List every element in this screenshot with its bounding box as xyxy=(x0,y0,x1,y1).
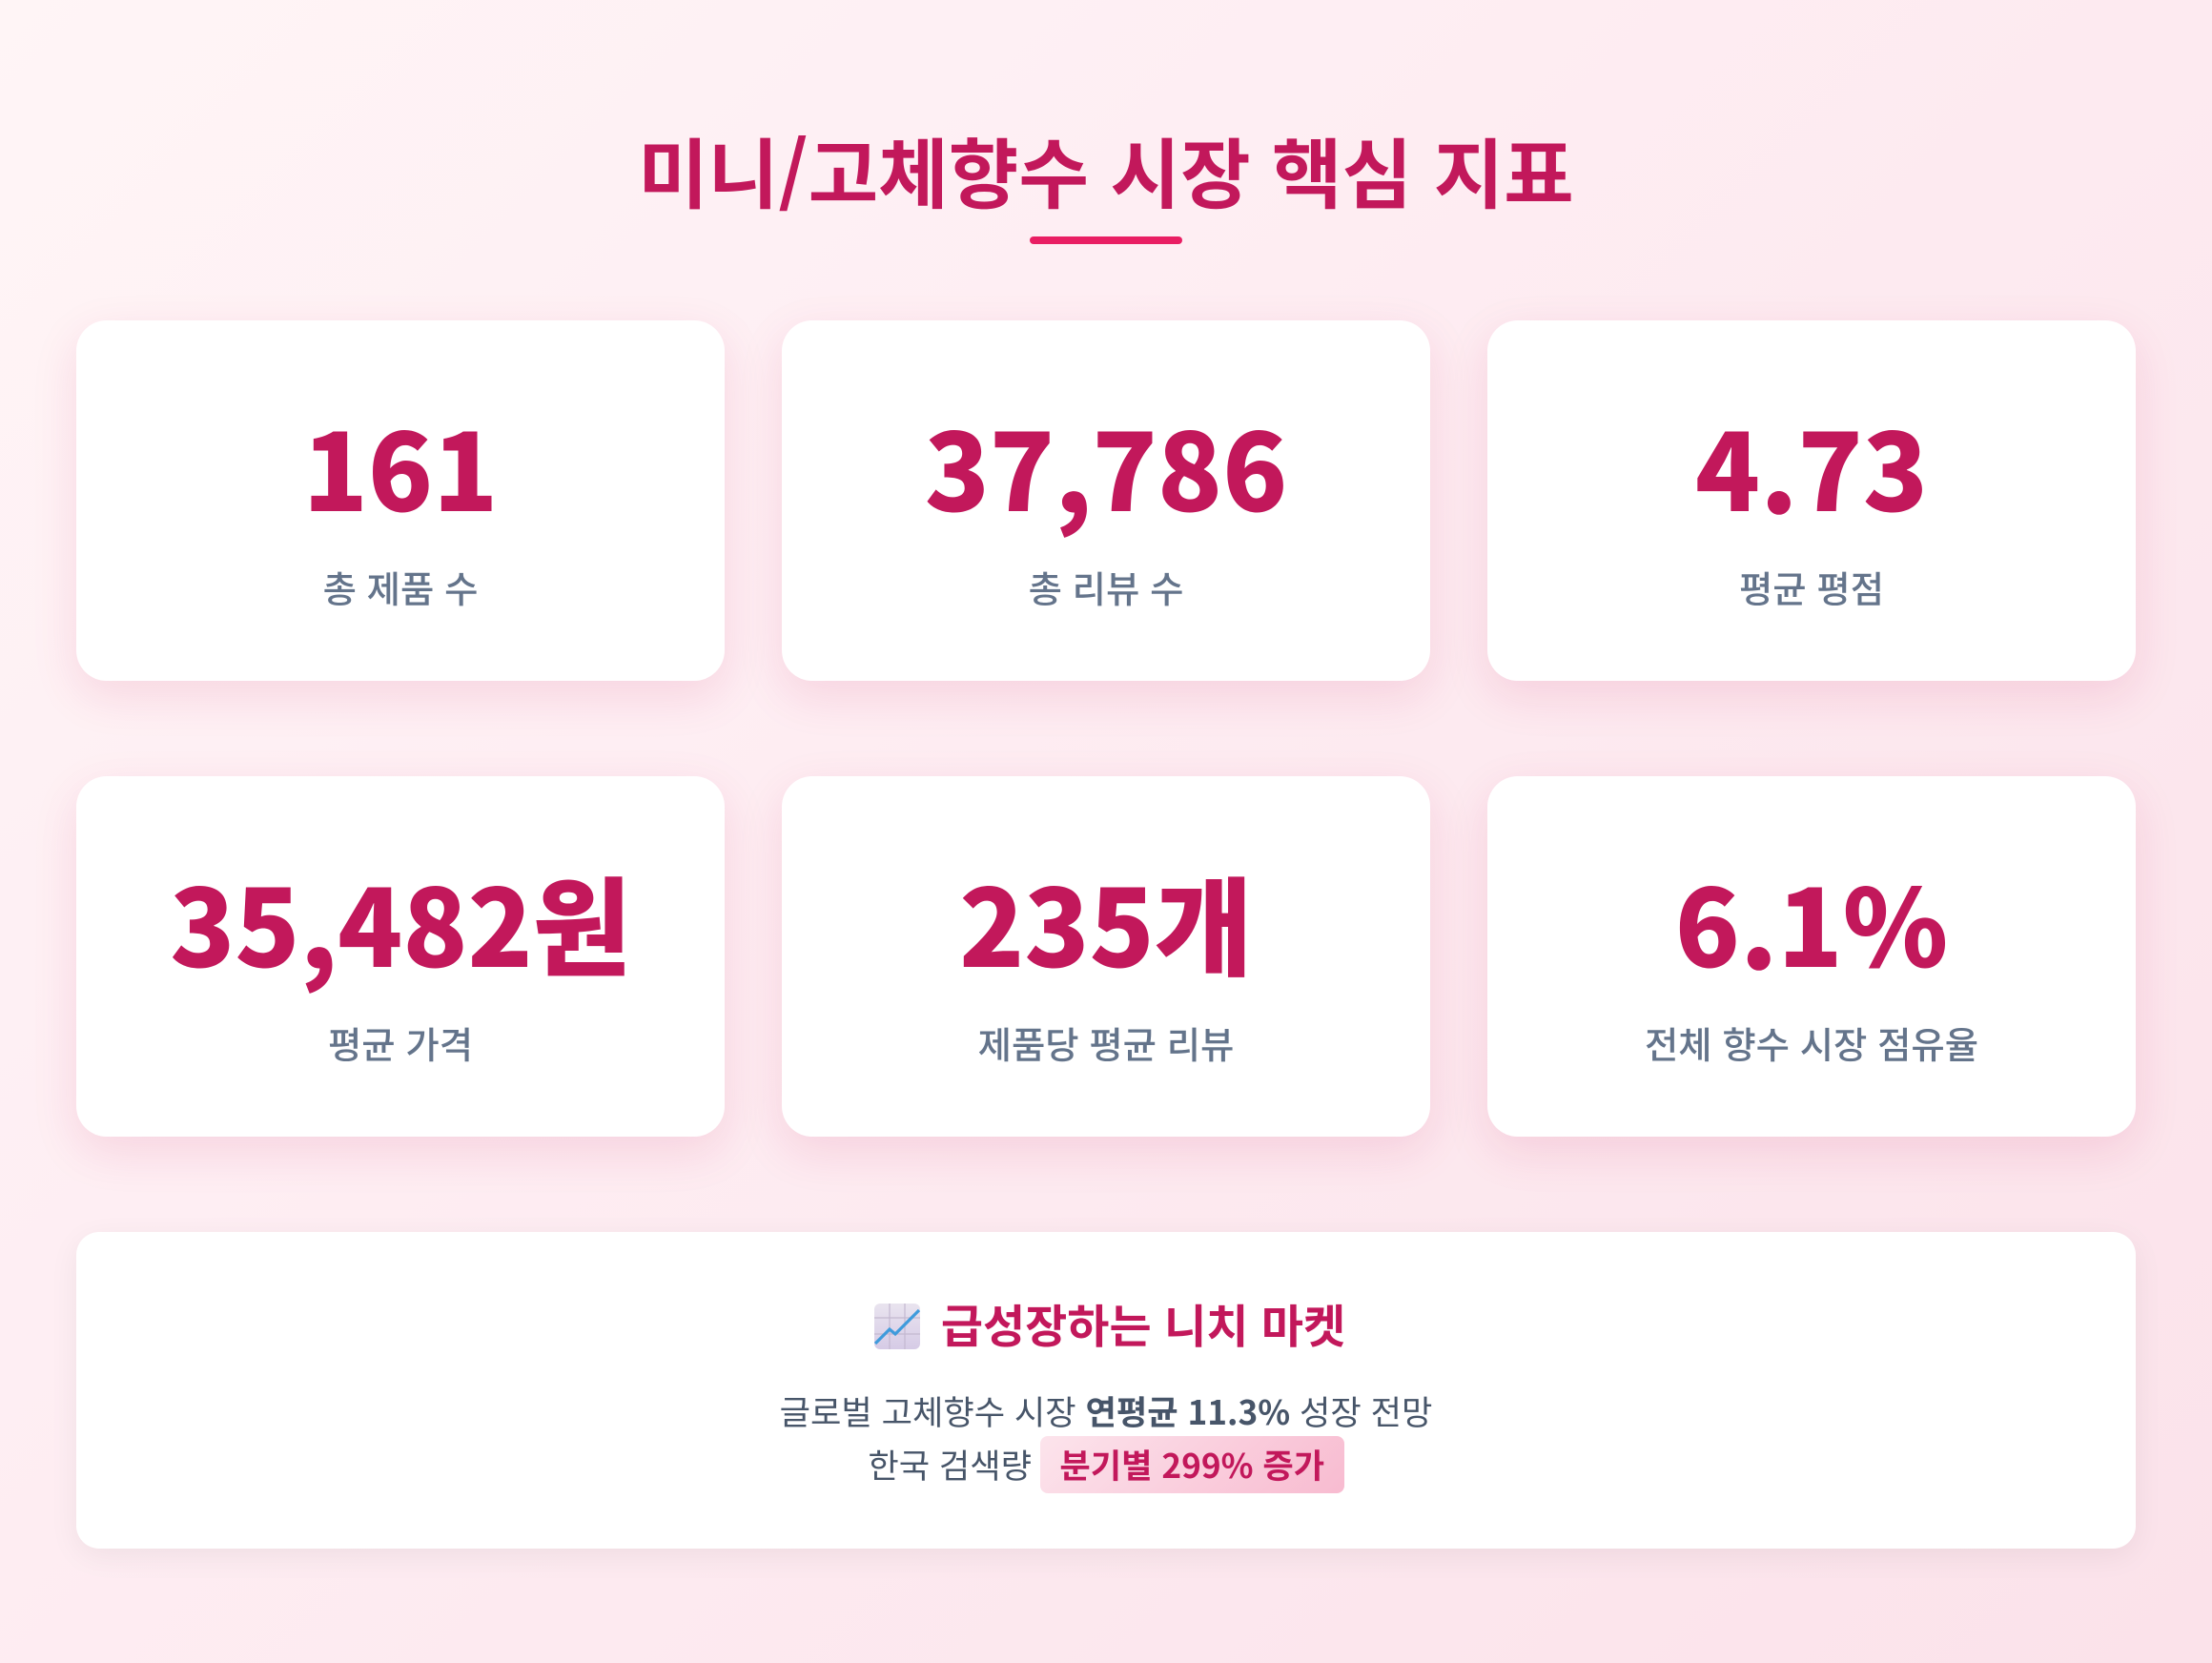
card: average rating: 4.73 xyxy=(1695,388,1928,543)
card: total products xyxy=(76,320,725,681)
card: average price: 평균 가격 xyxy=(328,1016,473,1070)
card: total reviews: 총 리뷰 수 xyxy=(1029,561,1183,614)
card: total products: 161 xyxy=(303,388,498,543)
text: korea search volume: 한국 검색량 xyxy=(868,1440,1032,1488)
icon: chart increasing xyxy=(874,1304,920,1349)
panel: niche market insight xyxy=(76,1232,2136,1549)
card: total products: 총 제품 수 xyxy=(323,561,478,614)
panel heading: 급성장하는 니치 마켓 xyxy=(941,1289,1345,1356)
title: 미니/고체향수 시장 핵심 지표 xyxy=(638,114,1574,225)
text: global growth: 글로벌 고체향수 시장 연평균 11.3% 성장 전망 xyxy=(780,1386,1432,1435)
card: reviews per product xyxy=(782,776,1430,1137)
card: total reviews xyxy=(782,320,1430,681)
card: reviews per product: 제품당 평균 리뷰 xyxy=(978,1016,1234,1070)
card: total reviews: 37,786 xyxy=(925,388,1287,543)
card: market share: 전체 향수 시장 점유율 xyxy=(1645,1016,1978,1070)
card: reviews per product: 235개 xyxy=(959,844,1253,998)
text: korea search volume: 분기별 299% 증가 xyxy=(1059,1440,1324,1488)
card: average rating: 평균 평점 xyxy=(1739,561,1884,614)
card: market share xyxy=(1487,776,2136,1137)
text: korea search volume xyxy=(868,1436,1344,1493)
title underline xyxy=(1030,236,1182,244)
card: average price xyxy=(76,776,725,1137)
card: market share: 6.1% xyxy=(1675,844,1948,998)
card: average rating xyxy=(1487,320,2136,681)
card: average price: 35,482원 xyxy=(170,844,631,998)
